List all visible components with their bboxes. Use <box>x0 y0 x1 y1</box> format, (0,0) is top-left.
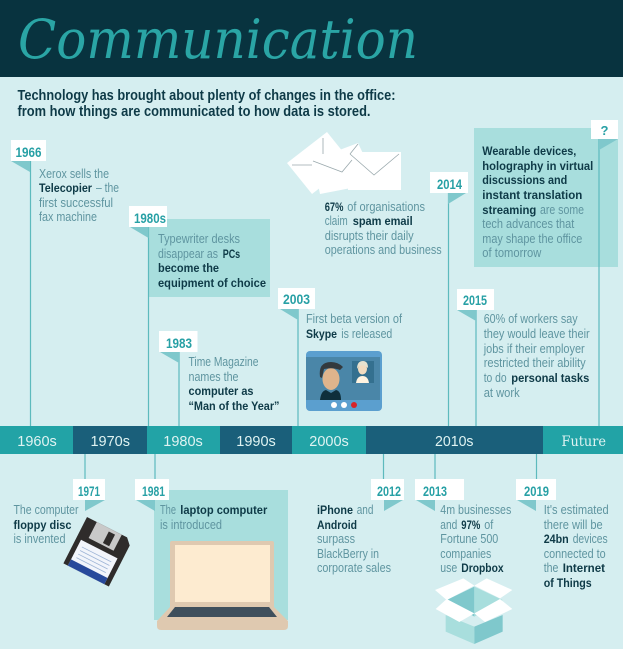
event: 1966: fax machine <box>39 210 97 224</box>
event: 1983: Time Magazine <box>188 355 259 369</box>
event: 2012: and <box>357 503 373 517</box>
event: 1966: – the <box>96 181 119 195</box>
event: 2015 <box>457 289 590 426</box>
panel: 1981 laptop <box>135 454 288 630</box>
timeline bar: Future <box>562 434 606 450</box>
event: 2013 <box>415 454 512 644</box>
event: 2019: 24bn <box>544 532 569 546</box>
timeline bar <box>0 426 623 454</box>
panel: 1981 laptop: is introduced <box>160 518 222 532</box>
event: 2013: Dropbox <box>461 561 504 575</box>
event: 2012 <box>317 454 404 575</box>
event: 2019: the <box>544 561 558 575</box>
event: 2019: connected to <box>544 547 606 561</box>
event: 2013: 2013 <box>423 483 447 499</box>
event: 2012: surpass <box>317 532 355 546</box>
panel: future: streaming <box>482 203 536 217</box>
text: spam email: disrupts their daily <box>325 229 414 243</box>
event: 1966: Telecopier <box>39 181 92 195</box>
icon: open box <box>435 578 512 644</box>
panel: future: tech advances that <box>482 217 575 231</box>
event: 2012: BlackBerry in <box>317 547 379 561</box>
timeline bar: 1990s <box>236 434 276 450</box>
event: 2013: companies <box>440 547 491 561</box>
panel: 1980s: become the <box>158 261 219 275</box>
event: 1966: 1966 <box>16 144 42 160</box>
panel: 1980s <box>129 206 270 426</box>
panel: 1981 laptop: 1981 <box>142 483 165 499</box>
event: 1966 <box>11 140 119 426</box>
event: 2015: 60% of workers say <box>484 312 578 326</box>
event: 2012: 2012 <box>377 483 401 499</box>
panel: 1980s: PCs <box>223 247 240 261</box>
event: 2003 <box>278 288 402 426</box>
timeline bar: 2000s <box>309 434 349 450</box>
event: 2003: First beta version of <box>306 312 402 326</box>
event: 2003: Skype <box>306 327 337 341</box>
event: 2015: restricted their ability <box>484 356 586 370</box>
panel: future: are some <box>540 203 584 217</box>
panel: 1980s: disappear as <box>158 247 218 261</box>
event: 2015: at work <box>484 386 520 400</box>
panel: future: of tomorrow <box>482 246 542 260</box>
panel: 1980s: equipment of choice <box>158 276 266 290</box>
event: 2013: of <box>484 518 494 532</box>
event: 1983 <box>159 331 280 426</box>
event: 1983: names the <box>188 370 239 384</box>
text: spam email: claim <box>325 214 348 228</box>
event: 2015: to do <box>484 371 507 385</box>
event: 2019: It's estimated <box>544 503 609 517</box>
event: 1971: The computer <box>14 503 78 517</box>
event: 1966: first successful <box>39 196 113 210</box>
panel: 1981 laptop: The <box>160 503 176 517</box>
event: 2014: 2014 <box>437 176 462 192</box>
panel: 1981 laptop: laptop computer <box>180 503 268 517</box>
text: spam email <box>325 200 442 257</box>
timeline bar: 1970s <box>90 434 130 450</box>
event: 1983: 1983 <box>166 335 192 351</box>
event: 2015: personal tasks <box>511 371 590 385</box>
timeline bar: 1980s <box>163 434 203 450</box>
event: 2013: Fortune 500 <box>440 532 498 546</box>
event: 2019: Internet <box>563 561 605 575</box>
event: 2013: 97% <box>461 518 481 532</box>
event: 2012: corporate sales <box>317 561 391 575</box>
panel: future: Wearable devices, <box>482 144 576 158</box>
text: spam email: of organisations <box>347 200 425 214</box>
event: 2013: 4m businesses <box>440 503 511 517</box>
event: 1971 <box>14 454 132 586</box>
timeline bar: 2010s <box>435 434 474 450</box>
event: 2014 <box>430 172 468 426</box>
event: 1966: Xerox sells the <box>39 167 109 181</box>
intro text: from how things are communicated to how data is stored. <box>18 104 370 120</box>
event: 2003: is released <box>341 327 392 341</box>
panel: future <box>474 120 618 426</box>
icon: floppy disc <box>63 517 132 586</box>
header banner <box>0 0 623 77</box>
intro text <box>18 88 396 120</box>
event: 2015: jobs if their employer <box>483 342 585 356</box>
event: 2012: iPhone <box>317 503 353 517</box>
event: 2019 <box>516 454 609 590</box>
event: 2015: they would leave their <box>484 327 590 341</box>
panel: future: instant translation <box>482 188 582 202</box>
event: 1983: computer as <box>188 384 254 398</box>
icon: laptop <box>157 541 288 630</box>
event: 1971: is invented <box>14 532 66 546</box>
event: 2012: Android <box>317 518 357 532</box>
panel: future: holography in virtual <box>482 159 593 173</box>
panel: 1980s: 1980s <box>134 210 166 226</box>
icon: video call <box>306 351 382 411</box>
panel: 1980s: Typewriter desks <box>158 232 240 246</box>
panel: future: may shape the office <box>482 232 582 246</box>
text: spam email: spam email <box>353 214 413 228</box>
event: 2013: and <box>440 518 457 532</box>
event: 2019: of Things <box>544 576 592 590</box>
timeline bar: 1960s <box>17 434 57 450</box>
icon: envelopes <box>287 132 401 194</box>
event: 2003: 2003 <box>283 291 310 307</box>
event: 1971: floppy disc <box>14 518 72 532</box>
event: 2015: 2015 <box>463 292 487 308</box>
panel: future: discussions and <box>482 173 567 187</box>
event: 1971: 1971 <box>78 483 100 499</box>
event: 1983: “Man of the Year” <box>188 399 280 413</box>
title: Communication <box>18 8 418 71</box>
text: spam email: operations and business <box>325 243 442 257</box>
intro text: Technology has brought about plenty of changes in the office: <box>18 88 396 104</box>
event: 2019: 2019 <box>524 483 549 499</box>
text: spam email: 67% <box>325 200 344 214</box>
event: 2019: there will be <box>544 518 603 532</box>
event: 2013: use <box>440 561 457 575</box>
panel: future: ? <box>600 123 608 138</box>
event: 2019: devices <box>573 532 608 546</box>
